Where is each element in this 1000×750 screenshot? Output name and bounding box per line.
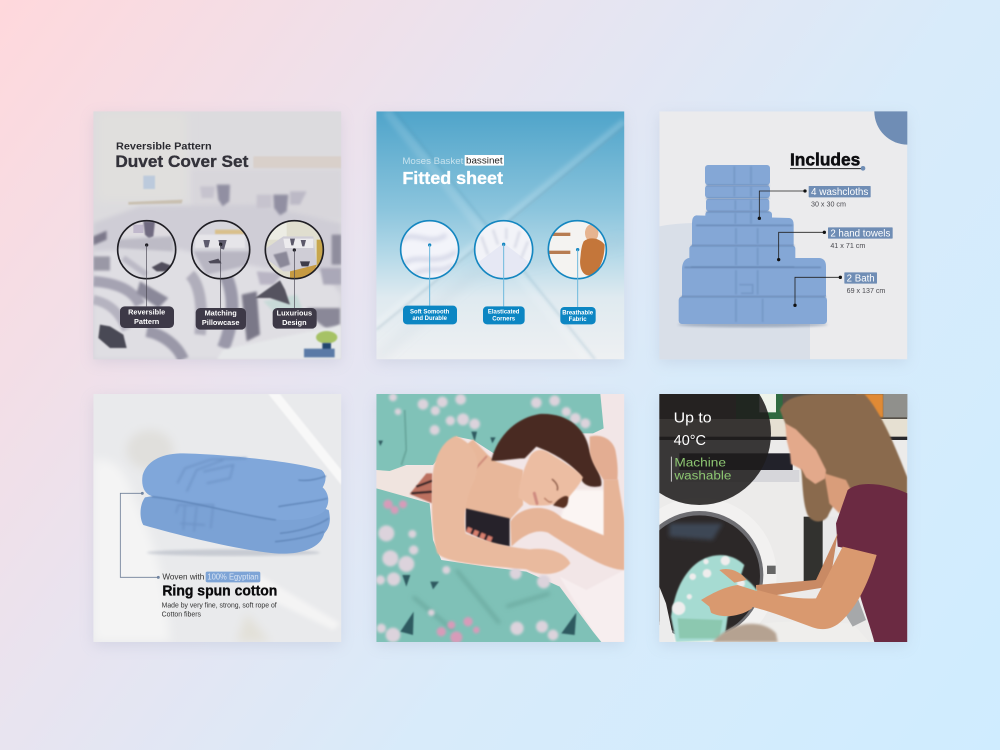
text block: up to 40°C machine washable: washable (673, 468, 732, 482)
callout: luxurious design (264, 220, 325, 329)
heading: duvet cover set: Reversible Pattern (116, 142, 212, 153)
callout: soft and durable: and Durable (412, 316, 448, 322)
panel: towel set includes (660, 111, 908, 360)
black lace top (466, 508, 510, 547)
fabric background (376, 111, 624, 359)
callout: 2 bath: 69 x 137 cm (847, 288, 886, 295)
towel stack (678, 165, 828, 327)
callout: 4 washcloths: 4 washcloths (811, 187, 868, 198)
callout: reversible pattern: Pattern (134, 317, 160, 326)
panel: duvet cover set (93, 111, 342, 359)
heading: fitted sheet: Fitted sheet (402, 168, 503, 188)
text block: ring spun cotton (162, 571, 278, 619)
lower towel (141, 494, 330, 554)
callout: reversible pattern (117, 220, 177, 328)
decorative corner circle (874, 111, 908, 145)
callout: soft and durable (400, 220, 460, 324)
callout: 2 bath (793, 272, 886, 307)
text block: up to 40°C machine washable: Machine (674, 456, 726, 470)
text block: ring spun cotton: Woven with (162, 571, 205, 581)
callout: matching pillowcase: Pillowcase (202, 318, 239, 327)
folded blue towels (141, 453, 330, 556)
neck (824, 473, 853, 513)
callout: 4 washcloths (758, 186, 871, 220)
under-chin hair (553, 496, 568, 508)
heading: duvet cover set: Duvet Cover Set (115, 152, 249, 171)
upper towel (142, 453, 328, 509)
face (785, 423, 826, 484)
callout: reversible pattern: Reversible (128, 308, 165, 317)
text block: up to 40°C machine washable (671, 411, 732, 482)
callout: matching pillowcase: Matching (205, 309, 237, 318)
maroon shirt (836, 484, 907, 642)
callout: 2 hand towels (777, 227, 893, 261)
hair (491, 414, 601, 487)
text block: ring spun cotton: 100% Egyptian (207, 573, 259, 582)
left arm of woman (432, 436, 570, 574)
callout: 4 washcloths: 30 x 30 cm (811, 201, 846, 208)
teal duvet with flowers (376, 393, 604, 643)
text block: ring spun cotton: Cotton fibers (162, 610, 201, 619)
text block: up to 40°C machine washable: 40°C (674, 433, 706, 449)
bed sheet (376, 394, 624, 642)
hair (780, 394, 907, 521)
panel: machine washable (622, 362, 907, 652)
front arm and hand (701, 547, 877, 629)
callout: soft and durable: Soft Somooth (410, 309, 450, 315)
heading: fitted sheet: bassinet (466, 156, 503, 166)
raised hand (590, 436, 618, 480)
back arm (756, 533, 838, 598)
panel: ring spun cotton (93, 394, 341, 642)
pale background shape (659, 223, 810, 359)
text block: ring spun cotton: Ring spun cotton (162, 584, 277, 600)
heading: includes: Includes (790, 149, 860, 169)
callout: elasticated corners: Elasticated (488, 310, 520, 316)
callout: elasticated corners (473, 220, 536, 324)
callout: 2 hand towels: 41 x 71 cm (830, 243, 866, 250)
face details (471, 457, 558, 503)
chest and neck skin (465, 438, 524, 520)
text block: ring spun cotton: Made by very fine, strong, soft rope of (162, 601, 278, 610)
connector line (120, 492, 159, 578)
panel: woman sleeping photo (376, 393, 624, 643)
callout: luxurious design: Luxurious (277, 309, 312, 318)
callout: 2 hand towels: 2 hand towels (830, 228, 890, 239)
callout: matching pillowcase (190, 220, 250, 330)
heading: fitted sheet (403, 155, 504, 184)
callout: breathable fabric (547, 220, 607, 324)
teal bedding in hands (671, 555, 759, 642)
heading: fitted sheet: Moses Basket (402, 156, 464, 166)
callout: luxurious design: Design (282, 318, 307, 327)
panel: fitted sheet (376, 111, 624, 359)
dark overlay circle (628, 362, 771, 505)
right arm of woman (510, 479, 624, 570)
laundry photo (622, 394, 907, 652)
callout: 2 bath: 2 Bath (847, 273, 875, 284)
text block: up to 40°C machine washable: Up to (674, 411, 712, 427)
card shadows (93, 115, 907, 646)
callout: elasticated corners: Corners (492, 316, 516, 322)
callout: breathable fabric: Breathable (562, 310, 594, 316)
face (518, 450, 583, 506)
bedroom photo (93, 111, 342, 359)
callout: breathable fabric: Fabric (569, 317, 587, 323)
heading: duvet cover set (116, 142, 248, 168)
faded background photo (93, 394, 341, 642)
white trousers (739, 622, 869, 642)
striped top behind (410, 473, 432, 503)
